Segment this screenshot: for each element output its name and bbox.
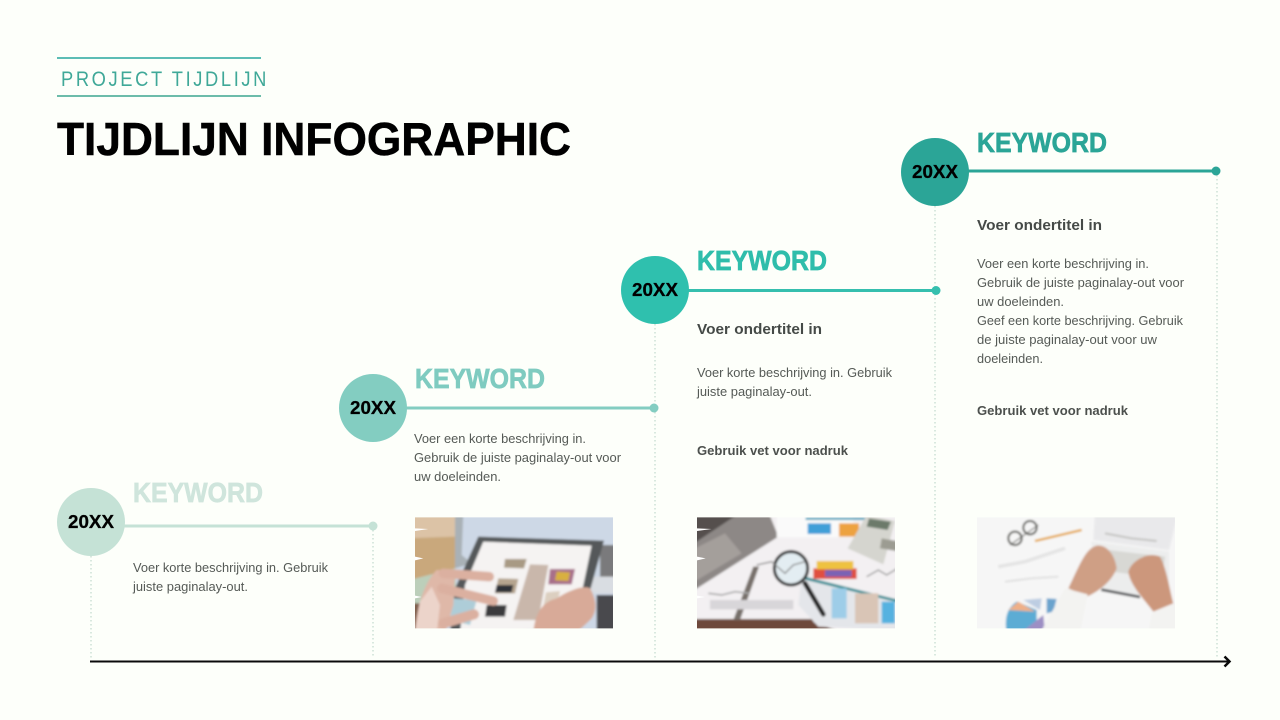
panel: milestone 4: de juiste paginalay-out voor uw bbox=[977, 332, 1158, 347]
panel: milestone 4 bbox=[901, 127, 1220, 418]
header: eyebrow label: PROJECT TIJDLIJN bbox=[61, 68, 269, 91]
panel: milestone 4: Voer ondertitel in bbox=[977, 217, 1102, 234]
panel: milestone 4: KEYWORD bbox=[977, 127, 1107, 158]
panel: milestone 1: KEYWORD bbox=[133, 477, 263, 508]
panel: milestone 4: Gebruik de juiste paginalay-out voor bbox=[977, 275, 1185, 290]
panel: milestone 2: KEYWORD bbox=[415, 363, 545, 394]
panel: milestone 2: uw doeleinden. bbox=[414, 469, 501, 484]
panel: milestone 4: Gebruik vet voor nadruk bbox=[977, 403, 1129, 418]
title: TIJDLIJN INFOGRAPHIC bbox=[57, 113, 571, 165]
panel: milestone 3: Voer korte beschrijving in. Gebruik bbox=[697, 365, 892, 380]
panel: milestone 2: 20XX bbox=[350, 398, 396, 418]
panel: milestone 3: 20XX bbox=[632, 280, 678, 300]
panel: milestone 3: Voer ondertitel in bbox=[697, 321, 822, 338]
panel: milestone 4: doeleinden. bbox=[977, 351, 1043, 366]
panel: milestone 4: uw doeleinden. bbox=[977, 294, 1064, 309]
panel: milestone 4: Geef een korte beschrijving. Gebruik bbox=[977, 313, 1183, 328]
panel: milestone 2 bbox=[339, 363, 658, 484]
arrow: time axis bbox=[90, 656, 1230, 666]
dotted vertical guides bbox=[91, 171, 1217, 659]
panel: milestone 1: Voer korte beschrijving in. Gebruik bbox=[133, 560, 328, 575]
photo: hands on tablet bbox=[415, 517, 613, 628]
panel: milestone 1: 20XX bbox=[68, 512, 114, 532]
panel: milestone 3: juiste paginalay-out. bbox=[696, 384, 812, 399]
panel: milestone 1 bbox=[57, 477, 378, 594]
panel: milestone 3: KEYWORD bbox=[697, 245, 827, 276]
panel: milestone 4: Voer een korte beschrijving in. bbox=[977, 256, 1149, 271]
panel: milestone 4: 20XX bbox=[912, 162, 958, 182]
panel: milestone 3: Gebruik vet voor nadruk bbox=[697, 443, 849, 458]
panel: milestone 1: juiste paginalay-out. bbox=[132, 579, 248, 594]
photo: magnifying glass over charts bbox=[697, 517, 895, 628]
panel: milestone 2: Gebruik de juiste paginalay-out voor bbox=[414, 450, 622, 465]
photo: hands typing on laptop bbox=[977, 518, 1175, 628]
panel: milestone 3 bbox=[621, 245, 940, 458]
panel: milestone 2: Voer een korte beschrijving in. bbox=[414, 431, 586, 446]
